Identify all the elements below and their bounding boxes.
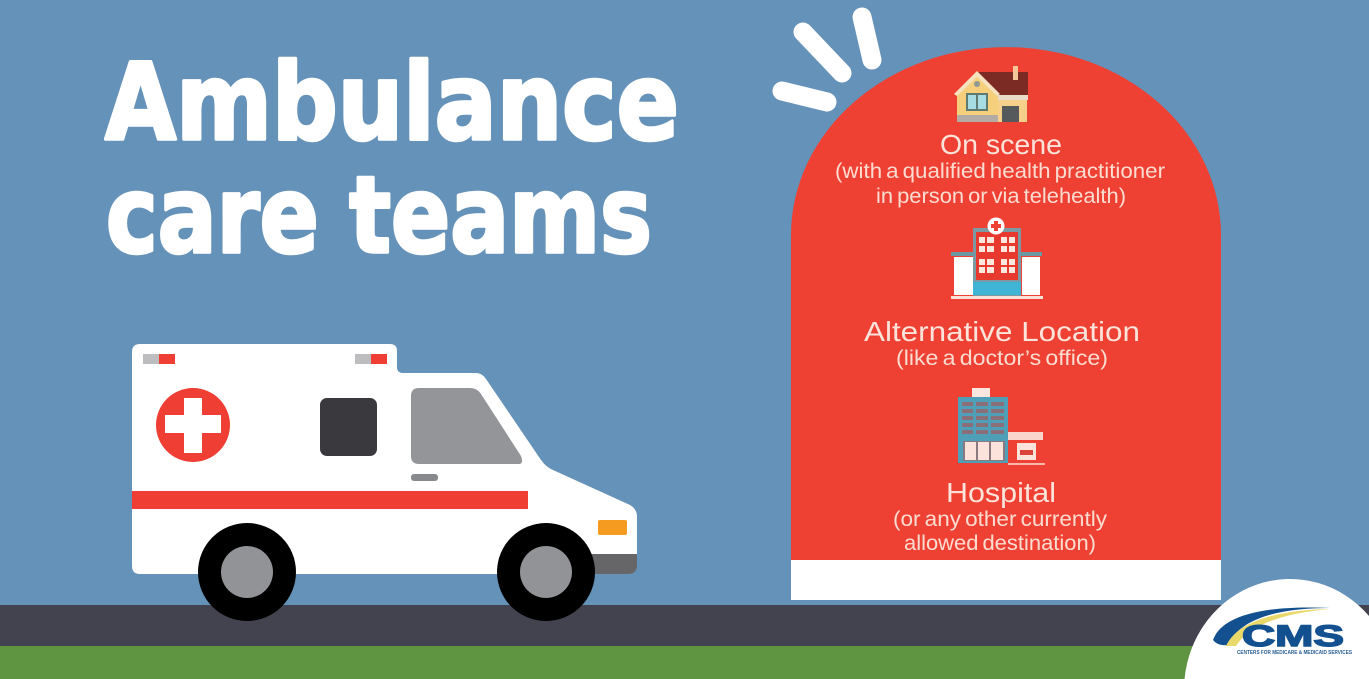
- text: hospital: (or any other currently: [893, 508, 1108, 531]
- rear wheel: [198, 523, 296, 621]
- icon: hospital: [958, 388, 1045, 465]
- text: on scene: in person or via telehealth): [876, 185, 1126, 208]
- text: alternative location: (like a doctor’s office): [896, 347, 1108, 370]
- roof light rear: [143, 354, 175, 364]
- side window: [320, 398, 377, 456]
- title: care teams: [106, 154, 652, 277]
- logo wordmark: CMS: [1242, 620, 1344, 653]
- ambulance: [132, 344, 637, 621]
- panel: care destinations: [791, 47, 1221, 600]
- headlight: [598, 520, 627, 535]
- grass: [0, 646, 1369, 679]
- title: [105, 41, 679, 277]
- door handle: [411, 474, 438, 481]
- red stripe: [132, 491, 528, 509]
- logo badge: [1184, 579, 1369, 679]
- icon: clinic: [951, 218, 1043, 299]
- title: Ambulance: [105, 41, 679, 164]
- logo swoosh: [1213, 607, 1330, 645]
- roof light front: [355, 354, 387, 364]
- text: on scene: On scene: [940, 129, 1062, 160]
- road: [0, 605, 1369, 646]
- arch: [791, 47, 1221, 560]
- text: hospital: [893, 477, 1108, 555]
- text: alternative location: [864, 316, 1140, 370]
- icon: house: [954, 66, 1028, 122]
- text: hospital: Hospital: [946, 477, 1056, 508]
- text: on scene: [835, 129, 1165, 208]
- burst lines: [782, 17, 872, 102]
- text: on scene: (with a qualified health practitioner: [835, 160, 1165, 183]
- bumper: [590, 553, 637, 574]
- logo swoosh highlight: [1226, 609, 1330, 646]
- white base: [791, 560, 1221, 600]
- ambulance body: [132, 344, 637, 574]
- red cross emblem: [156, 388, 230, 462]
- text: hospital: allowed destination): [904, 532, 1096, 555]
- logo tagline: CENTERS FOR MEDICARE & MEDICAID SERVICES: [1237, 650, 1352, 656]
- CMS logo: [1184, 579, 1369, 679]
- front wheel: [497, 523, 595, 621]
- text: alternative location: Alternative Location: [864, 316, 1140, 347]
- cab window: [411, 388, 522, 464]
